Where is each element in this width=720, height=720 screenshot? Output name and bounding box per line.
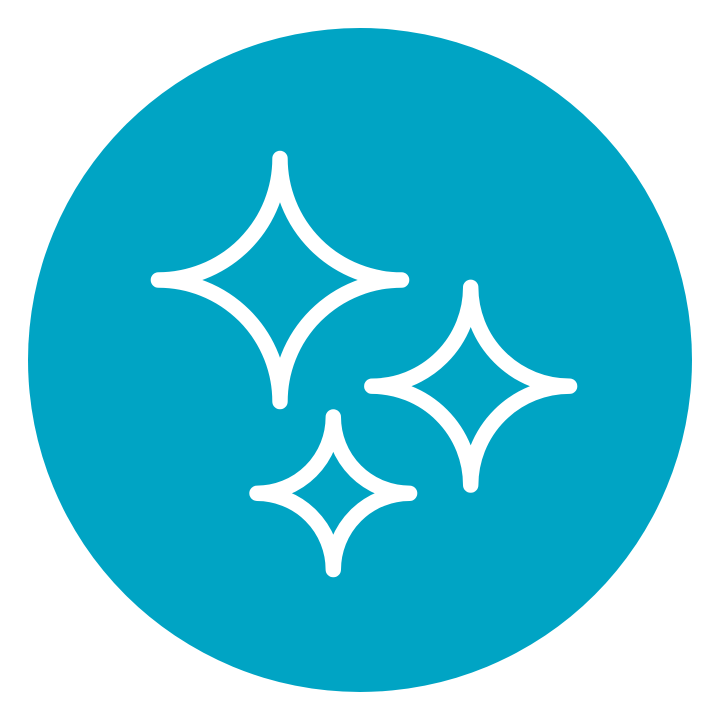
icon: large sparkle bbox=[158, 158, 402, 402]
icon: small sparkle bbox=[257, 417, 410, 570]
icon: medium sparkle bbox=[372, 287, 570, 485]
